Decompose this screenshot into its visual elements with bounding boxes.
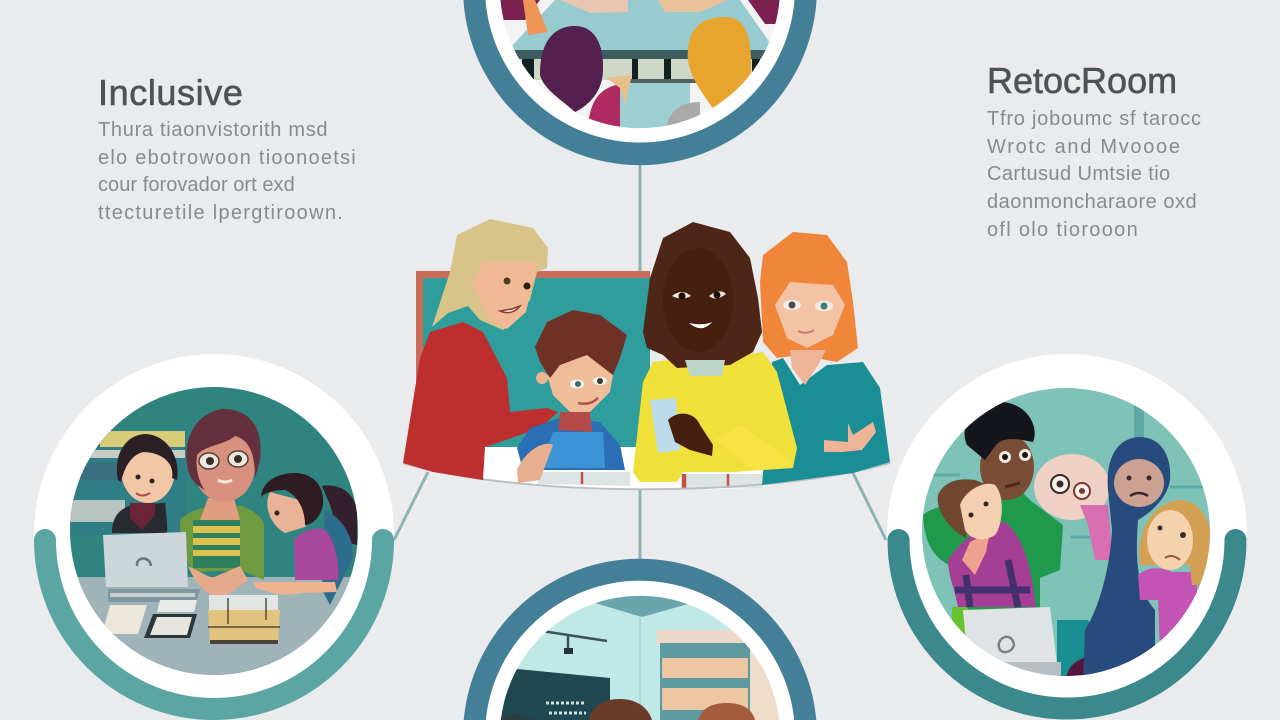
woman in blue hijab [1083,437,1170,680]
top circle panel [463,0,817,165]
stacked papers and tablet [102,600,197,638]
woman in yellow [633,222,797,482]
chalkboard [497,667,610,720]
text block: left [98,119,357,224]
table [508,0,775,50]
blonde girl in pink [1138,500,1213,650]
man in green jacket [923,402,1063,650]
woman with purple hair [540,26,632,127]
text block: right: Cartusud Umtsie tio [987,163,1171,185]
heading: Inclusive: Inclusive [98,72,243,113]
laptop [963,607,1061,676]
older woman [1034,454,1113,560]
text block: right: Wrotc and Mvoooe [987,136,1182,158]
adult in green [180,409,264,598]
girl in plaid [938,479,1036,607]
bottom circle panel [464,559,816,720]
text block: right [987,108,1202,241]
book box [208,595,280,644]
shelves [657,630,778,720]
seated figures at the corners [498,0,785,24]
bookshelf [66,430,186,535]
heading: RetocRoom: RetocRoom [987,60,1177,101]
right circle panel [887,354,1247,714]
central illustration [403,219,890,490]
student heads [497,699,755,720]
text block: right: Tfro joboumc sf tarocc [987,108,1202,130]
table with open books [403,447,890,490]
text block: left: ttecturetile lpergtiroown. [98,202,344,224]
ceiling [595,596,688,617]
glass and hand [650,398,680,453]
film strip edge [505,50,775,59]
projector [542,631,607,654]
text block: right: daonmoncharaore oxd [987,191,1197,213]
woman with orange hair [666,17,751,127]
text block: left: cour forovador ort exd [98,174,295,196]
text block: right: ofl olo tiorooon [987,219,1139,241]
laptop [103,532,200,602]
child on left [112,434,178,533]
text block: left: Thura tiaonvistorith msd [98,119,328,141]
table [78,577,350,675]
boy [517,310,627,483]
child on right [253,473,357,605]
woman with orange hair [760,232,890,485]
teal trousers and burgundy bag [1057,620,1108,680]
woman in red [403,219,558,480]
text block: left: elo ebotrowoon tioonoetsi [98,147,357,169]
left circle panel [34,354,394,714]
chalkboard [416,271,650,468]
